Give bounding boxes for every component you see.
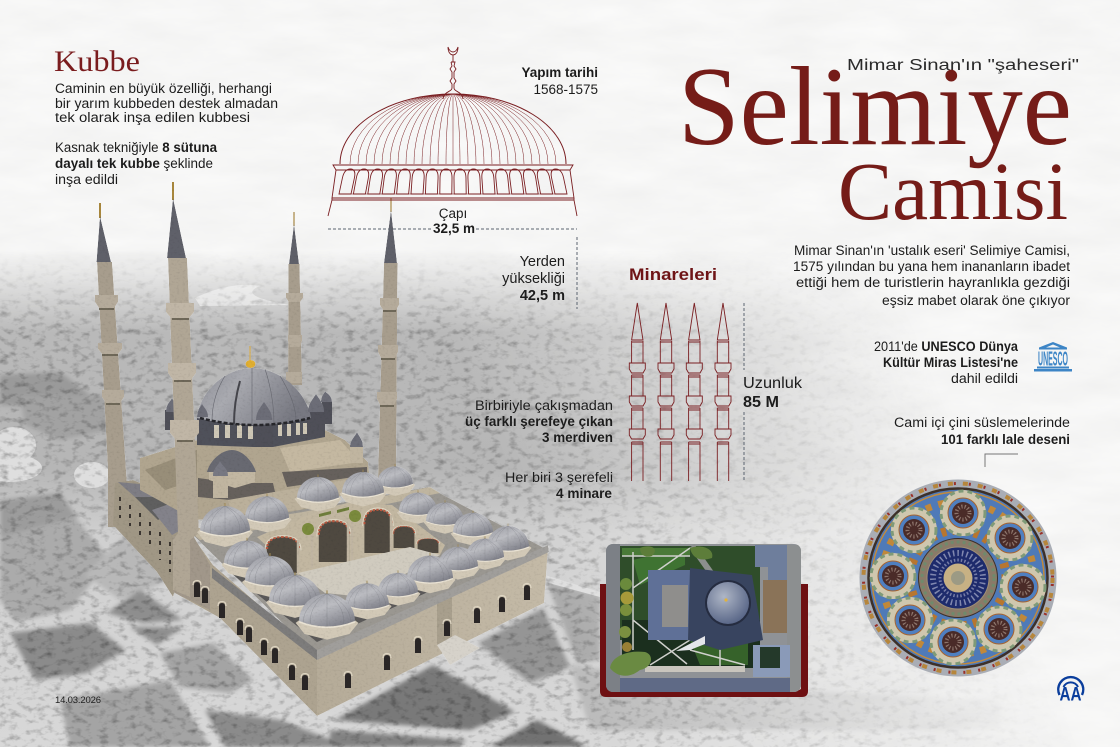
text: dome description: Caminin en büyük özelliği, herhangi [55,81,272,96]
label: minaret length [743,375,803,411]
subtitle: Mimar Sinan'ın "şaheseri" [847,57,1079,74]
logo: Anadolu Agency: AA [1060,684,1082,706]
callout bracket [985,454,1018,467]
drum with windows [165,402,332,447]
label: four minarets [505,470,613,501]
text: tile note: Cami içi çini süslemelerinde [894,415,1070,430]
label: construction dates: 1568-1575 [533,82,598,97]
central calligraphy medallion [918,538,998,618]
minaret length dashed measure [743,303,745,481]
text: UNESCO note: Kültür Miras Listesi'ne [883,355,1018,370]
label: height [502,254,565,304]
height dashed measure [576,237,578,309]
diameter dashed measure [328,228,577,230]
label: minaret length: Uzunluk [743,375,803,392]
dome ribs [340,94,566,164]
text: dome description: bir yarım kubbeden destek almadan [55,96,278,111]
front half dome [207,447,363,498]
label: four minarets: 4 minare [556,486,612,501]
title: Selimiye [678,45,1072,169]
text: UNESCO note [874,339,1018,386]
main dome [197,368,311,426]
label: height: yüksekliği [502,271,565,287]
left wing [113,480,197,597]
cornice and drum [328,165,577,216]
back minaret [286,212,303,385]
far left minaret [95,203,127,527]
mosque illustration [95,182,549,716]
right minaret [377,198,399,478]
main body walls [140,430,370,520]
red frame [600,584,808,697]
label: construction dates: Yapım tarihi [521,65,598,80]
label: three stairs: üç farklı şerefeye çıkan [465,414,613,429]
city ground tone [0,261,986,747]
text: intro paragraph: ettiği hem de turistlerin hayranlıkla gezdiği [796,275,1070,290]
label: height: 42,5 m [520,288,565,304]
label: four minarets: Her biri 3 şerefeli [505,470,613,485]
aerial photo panel [600,544,808,697]
heading: Kubbe: Kubbe [54,45,140,78]
text: dome description: Kasnak tekniğiyle 8 sütuna [55,140,217,155]
heading: Minareleri: Minareleri [629,265,717,284]
tile dome roundel [860,480,1056,676]
text: intro paragraph: eşsiz mabet olarak öne çıkıyor [882,293,1071,308]
light city features: river and domes [0,285,600,597]
text: tile note: 101 farklı lale deseni [941,432,1070,447]
diagram: four minarets [629,303,731,481]
text: dome description: dayalı tek kubbe şeklinde [55,156,213,171]
text: intro paragraph [793,243,1071,308]
text: dome description: inşa edildi [55,172,118,187]
gold finial [246,346,256,368]
entrance steps [437,635,480,665]
courtyard block [188,487,548,657]
turrets [166,391,363,447]
text: UNESCO note: 2011'de UNESCO Dünya [874,339,1018,354]
date stamp: 14.03.2026 [55,695,101,706]
label: three stairs: 3 merdiven [542,430,613,445]
label: diameter: 32,5 m [433,221,475,236]
diagram: dome section [328,47,577,234]
label: construction dates [521,65,598,97]
text: dome description [55,81,278,187]
courtyard floor [298,547,440,597]
text: dome description: tek olarak inşa edilen kubbesi [55,110,250,125]
drum windows [339,169,567,194]
label: minaret length: 85 M [743,394,779,411]
background: grey aerial city photo [0,257,1029,747]
text: intro paragraph: 1575 yılından bu yana hem inananların ibadet [793,259,1070,274]
text: UNESCO note: dahil edildi [951,371,1018,386]
portal arcade [265,507,440,573]
label: three stairs: Birbiriyle çakışmadan [475,398,613,413]
roof strips [212,540,549,660]
lead domes [197,464,532,640]
lawns and dark tree areas [0,372,1000,747]
logo: Anadolu Agency [1058,677,1083,706]
aerial photo [606,544,801,692]
text: tile note [894,415,1070,447]
title: Camisi [838,145,1068,237]
label: three stairs [465,398,613,445]
eight medallions [870,490,1046,665]
text: intro paragraph: Mimar Sinan'ın 'ustalık eseri' Selimiye Camisi, [794,243,1070,258]
front-left minaret [166,182,199,597]
label: diameter [433,206,475,236]
left outer wall [173,530,317,716]
label: diameter: Çapı [439,206,467,221]
crescent finial [443,47,463,99]
icon: UNESCO temple logo [1034,342,1072,372]
label: height: Yerden [520,254,565,270]
right outer wall [317,548,548,716]
title [678,45,1072,237]
